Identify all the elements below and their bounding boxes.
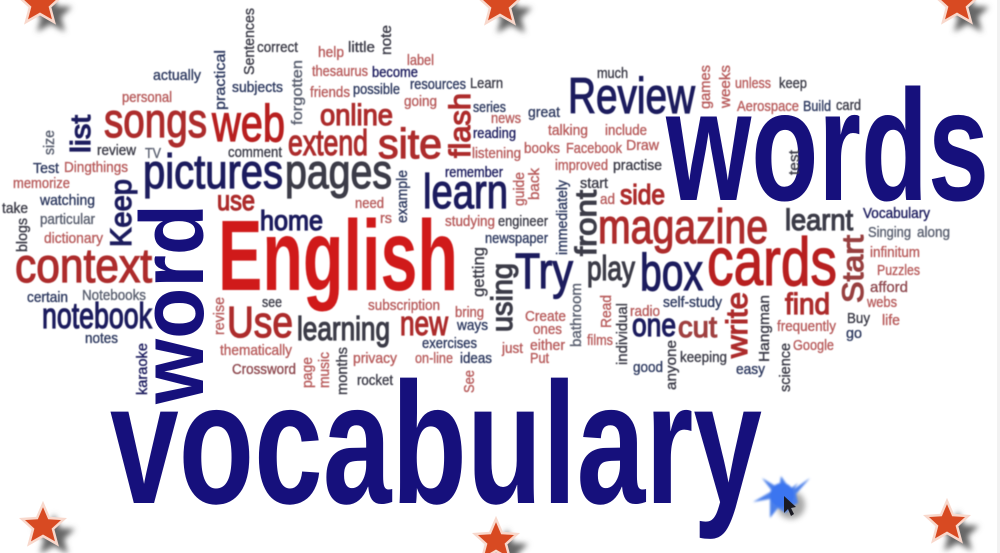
small words: upper left: subjects [232, 80, 283, 96]
medium words: dark grey: pages [285, 146, 392, 199]
small words: right side: along [917, 225, 950, 241]
small words: upper middle: card [836, 98, 861, 114]
small words: right side: Singing [868, 225, 911, 241]
medium words: navy [42, 68, 703, 343]
small words: upper left: going [404, 94, 437, 110]
medium words: red: songs [104, 95, 207, 148]
title word: vocabulary: vocabulary [110, 346, 762, 540]
medium words: dark grey: learning [297, 310, 390, 347]
small words: left side: Notebooks [82, 288, 146, 304]
small words: lower middle: bathroom [569, 283, 585, 347]
small words: lower middle: ideas [460, 351, 492, 367]
small words: left side: music [317, 352, 333, 388]
large word: English: English [218, 200, 458, 312]
medium words: dark grey: using [486, 263, 519, 332]
small words: right side: Hangman [757, 295, 773, 362]
small words: left side: see [262, 295, 282, 311]
small words: upper middle: immediately [555, 179, 571, 255]
small words: lower middle: just [501, 341, 523, 357]
small words: lower middle: subscription [368, 298, 440, 314]
small words: left side: dictionary [44, 231, 104, 247]
star: top right [936, 0, 989, 32]
small words: upper left: practical [213, 50, 229, 110]
small words: lower middle: films [587, 333, 613, 349]
small words: lower middle: Create [525, 309, 566, 325]
small words: left side: page [300, 357, 316, 388]
medium words: navy: home [260, 205, 323, 236]
small words: lower middle: either [530, 338, 565, 354]
small words: upper left: Dingthings [64, 160, 128, 176]
small words: upper middle: ad [600, 192, 615, 208]
small words: upper middle: Build [803, 99, 831, 115]
small words: upper left: little [348, 40, 375, 56]
small words: upper middle: test [787, 150, 803, 175]
small words: right side: easy [736, 362, 766, 378]
small words: upper middle: start [580, 176, 608, 192]
small words: upper left: thesaurus [312, 64, 368, 80]
small words: left side: notes [85, 331, 118, 347]
small words: upper left: TV [145, 146, 161, 162]
small words: lower middle: on-line [415, 351, 453, 367]
small words: right side: Buy [847, 311, 871, 327]
star: bottom left [22, 504, 75, 553]
small words: upper middle: unless [735, 76, 771, 92]
star: top centre [479, 0, 532, 33]
small words: upper middle: improved [555, 158, 608, 174]
small words: upper left: Sentences [242, 8, 258, 75]
small words: upper middle [355, 65, 861, 297]
small words: right side: Google [793, 338, 834, 354]
small words: right side: afford [870, 280, 908, 296]
small words: upper middle: games [698, 65, 714, 109]
small words: upper middle: remember [445, 165, 503, 181]
small words: upper left: correct [257, 40, 298, 56]
small words: upper middle: engineer [498, 214, 548, 230]
small words: left side: blogs [15, 218, 31, 252]
medium words: red: cards [707, 224, 837, 300]
small words: lower middle: bring [455, 305, 484, 321]
small words: upper left: note [379, 25, 395, 55]
medium words: red: Use [227, 298, 293, 347]
small words: upper middle: talking [548, 123, 588, 139]
medium words: red: new [400, 305, 448, 343]
small words: upper left: review [97, 143, 136, 159]
medium words: red: extend [288, 122, 368, 163]
small words: upper left: memorize [13, 176, 70, 192]
small words: upper middle: keep [779, 76, 807, 92]
small words: upper left: personal [122, 90, 172, 106]
small words: upper left [13, 8, 503, 192]
small words: upper left: actually [153, 68, 202, 84]
small words: upper left: resources [410, 77, 466, 93]
small words: lower middle: Read [599, 295, 615, 328]
small words: upper left: Learn [470, 76, 503, 92]
medium words: red: flash [444, 93, 477, 158]
small words: upper left: label [407, 53, 434, 69]
small words: left side: revise [212, 297, 228, 335]
small words: lower middle: ones [533, 322, 562, 338]
small words: left side: take [2, 201, 28, 217]
medium words: navy: Try [515, 243, 573, 299]
small words: upper middle: need [355, 196, 384, 212]
small words: upper left: friends [310, 85, 350, 101]
medium words: navy: Review [568, 68, 696, 124]
small words: right side: frequently [777, 319, 837, 335]
medium words: red: side [620, 179, 665, 210]
medium words: navy: learn [423, 166, 508, 219]
small words: upper middle: studying [445, 214, 495, 230]
medium words: red: context [15, 240, 152, 293]
large word: word (vertical): word [123, 204, 223, 405]
small words: left side: thematically [220, 343, 293, 359]
medium words: dark grey: play [587, 250, 635, 288]
small words: upper middle: guide [512, 172, 528, 206]
small words: upper middle: reading [473, 126, 516, 142]
medium words: navy: box [640, 244, 703, 302]
medium words: dark grey: learnt [785, 204, 854, 237]
small words: upper left: help [318, 45, 344, 61]
medium words: red: online [320, 99, 393, 132]
medium words: navy: notebook [42, 295, 153, 336]
star: top left [19, 0, 72, 32]
star: bottom right [926, 501, 979, 551]
small words: right side [663, 206, 950, 392]
small words: upper middle: great [528, 105, 560, 121]
small words: left side: Crossword [232, 362, 296, 378]
medium words: navy: Keep [105, 179, 138, 247]
small words: upper middle: listening [472, 146, 521, 162]
small words: lower middle [335, 283, 663, 395]
small words: right side: life [882, 313, 900, 329]
small words: lower middle: See [462, 370, 478, 393]
small words: right side: science [778, 343, 794, 392]
small words: right side: webs [866, 295, 897, 311]
small words: lower middle: Put [530, 351, 549, 367]
small words: upper left: forgotten [290, 60, 306, 125]
medium words: red: find [785, 288, 830, 321]
small words: upper left: become [372, 65, 418, 81]
small words: upper middle: newspaper [485, 231, 548, 247]
medium words: red: Start [837, 234, 870, 303]
medium words: red: magazine [598, 201, 768, 254]
small words: right side: Puzzles [877, 263, 920, 279]
small words: upper middle: much [597, 66, 628, 82]
medium words: dark grey [285, 146, 854, 347]
small words: right side: self-study [663, 295, 723, 311]
small words: upper left: size [42, 130, 58, 155]
star: bottom centre [475, 519, 528, 553]
small words: upper left: possible [353, 82, 400, 98]
small words: upper middle: Draw [626, 138, 660, 154]
small words: upper middle: example [395, 170, 411, 223]
small words: left side: certain [27, 290, 68, 306]
small words: right side: keeping [680, 350, 727, 366]
small words: upper middle: series [473, 100, 506, 116]
medium words: red: web [211, 95, 285, 153]
small words: upper middle: practise [613, 158, 662, 174]
small words: lower middle: rocket [357, 373, 393, 389]
medium words: red: write [721, 292, 754, 359]
small words: lower middle: individual [615, 303, 631, 365]
medium words: red [15, 93, 870, 359]
small words: right side: infinitum [870, 245, 920, 261]
small words: lower middle: good [633, 360, 663, 376]
icon: blue starburst with cursor [753, 476, 810, 519]
small words: lower middle: months [335, 347, 351, 395]
small words: left side [2, 193, 333, 395]
medium words: navy: list [65, 115, 96, 153]
small words: upper middle: rs [380, 211, 392, 227]
small words: right side: anyone [664, 340, 680, 390]
small words: upper middle: news [491, 111, 521, 127]
medium words: dark grey: front [570, 189, 603, 256]
medium words: red: cut [678, 311, 718, 344]
small words: lower middle: radio [630, 304, 660, 320]
medium words: navy: pictures [143, 146, 283, 199]
small words: left side: karaoke [135, 343, 151, 395]
small words: upper left: comment [228, 145, 282, 161]
small words: upper left: Test [33, 161, 59, 177]
medium words: red: use [217, 185, 255, 216]
small words: left side: particular [40, 212, 95, 228]
small words: left side: watching [39, 193, 95, 209]
small words: lower middle: exercises [422, 336, 477, 352]
small words: right side: go [846, 326, 862, 342]
small words: upper middle: Facebook [566, 141, 623, 157]
small words: upper middle: include [605, 123, 647, 139]
small words: right side: Vocabulary [863, 206, 931, 222]
small words: upper middle: back [527, 167, 543, 200]
medium words: red: site [378, 120, 442, 167]
small words: upper middle: books [524, 141, 560, 157]
small words: lower middle: privacy [353, 351, 398, 367]
medium words: navy: one [632, 307, 676, 343]
small words: upper middle: Aerospace [737, 99, 799, 115]
small words: upper middle: weeks [718, 65, 734, 109]
small words: lower middle: ways [456, 318, 488, 334]
small words: upper middle: getting [469, 247, 488, 297]
